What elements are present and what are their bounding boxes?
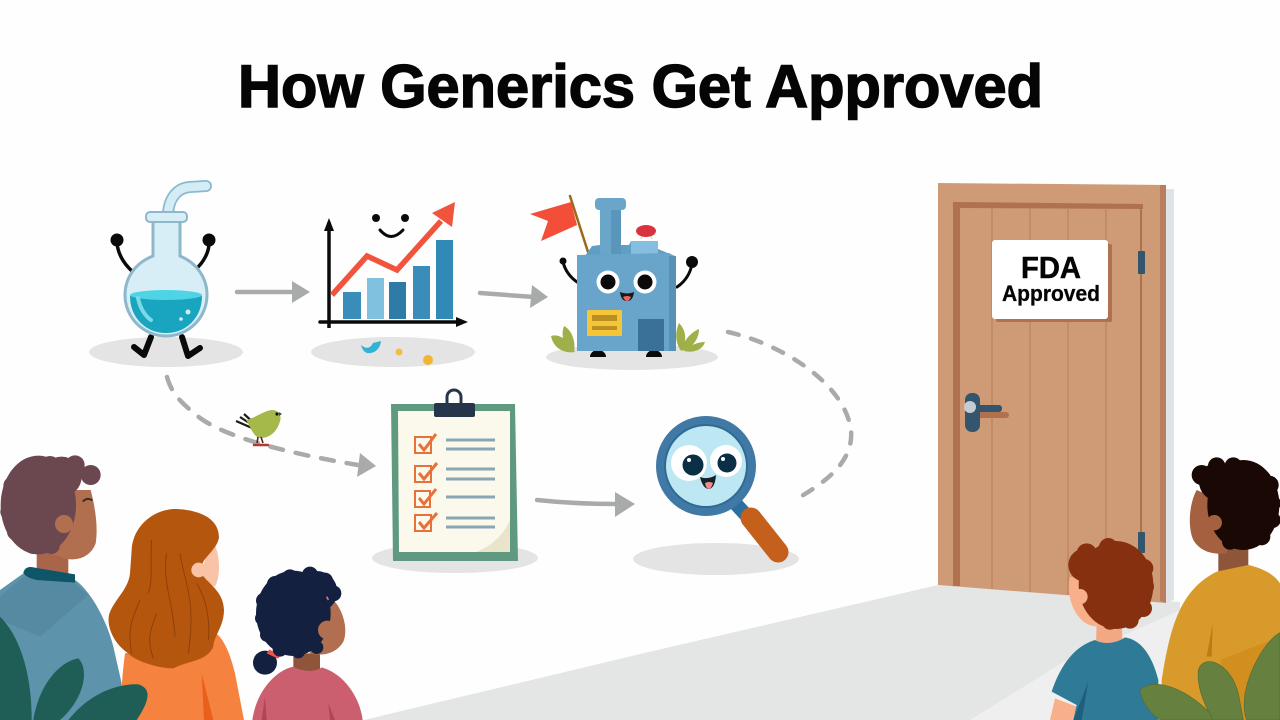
step 3: factory character [530,196,718,370]
FDA door [938,183,1174,603]
hinges [1138,251,1145,553]
FDA Approved sign: FDA [1021,250,1081,285]
man with curly hair and teal jacket [0,455,122,720]
woman with long auburn hair [109,509,244,720]
bird on the dashed path [236,410,282,445]
FDA Approved sign: Approved [1002,281,1100,306]
floor path to the door [364,585,1180,720]
title: How Generics Get Approved [238,53,1043,120]
arrow: chart to factory [480,285,548,308]
adult with yellow sweater [1162,457,1280,720]
step 4: checklist clipboard [372,390,538,573]
dashed arrow: factory and magnifier to door [728,332,851,497]
checklist text lines [446,440,495,527]
olive foliage right [1140,633,1280,720]
step 1: flask character [89,186,243,367]
door handle [964,393,1009,432]
step 5: magnifying glass character [633,416,799,575]
dashed arrow: flask to checklist [167,377,376,477]
step 2: rising bar chart character [311,202,475,367]
FDA Approved sign [992,240,1112,322]
arrow: flask to chart [237,281,310,303]
girl with dark curly hair and pink top [252,567,363,720]
boy with blue shirt [1050,538,1158,720]
audience left [0,455,363,720]
audience right [1050,457,1280,720]
clipboard clip [434,390,475,417]
arrow: checklist to magnifier [537,492,635,517]
dark green foliage left [0,617,148,720]
checkbox rows [415,434,437,531]
